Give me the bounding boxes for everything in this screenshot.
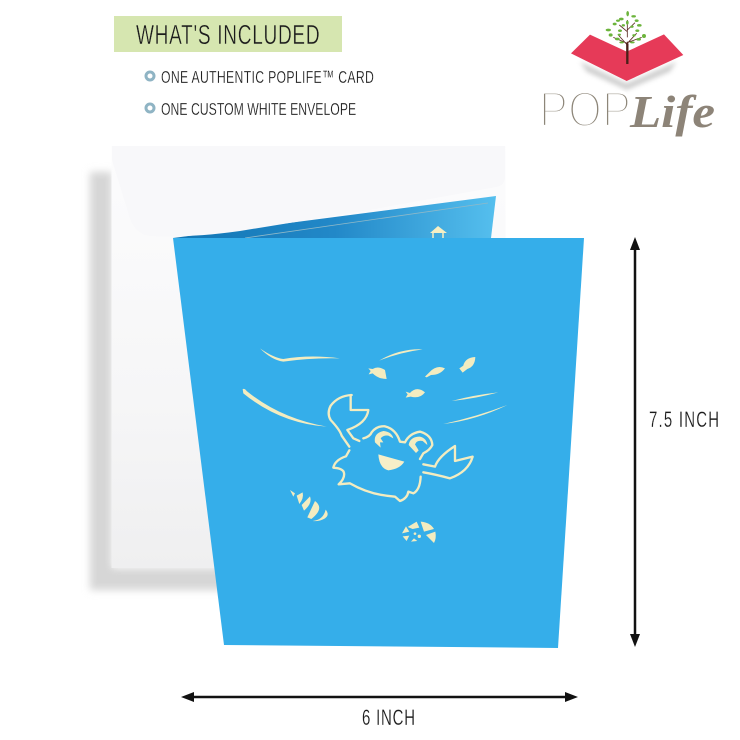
label: 6 inch: 6 INCH [362,705,415,730]
envelope [90,146,506,590]
envelope body [112,146,506,568]
pop-up card front [173,238,584,648]
card cover [173,238,584,648]
arrow: width dimension [181,692,578,702]
arrow: height dimension [630,237,640,647]
logo wordmark: POP [539,82,631,138]
heading: what's included: WHAT'S INCLUDED [136,19,320,51]
crab eyes [375,431,427,453]
waves [243,348,507,427]
item: poplife card: ONE AUTHENTIC POPLIFE™ CARD [161,68,374,88]
fish [368,357,475,398]
logo tree [606,11,646,64]
crab mouth [378,454,404,470]
logo: poplife: Life [629,86,715,137]
sea artwork [243,348,507,543]
envelope flap [112,146,505,236]
logo book [571,34,683,90]
inner card [173,196,496,238]
label: 7.5 inch: 7.5 INCH [649,407,719,432]
shell: scallop [402,522,436,543]
item: white envelope: ONE CUSTOM WHITE ENVELOPE [161,100,356,120]
crab [329,395,473,501]
shell: cone [290,490,328,521]
list: included items [146,68,374,120]
envelope shadow [90,172,232,590]
logo: poplife [539,11,715,137]
